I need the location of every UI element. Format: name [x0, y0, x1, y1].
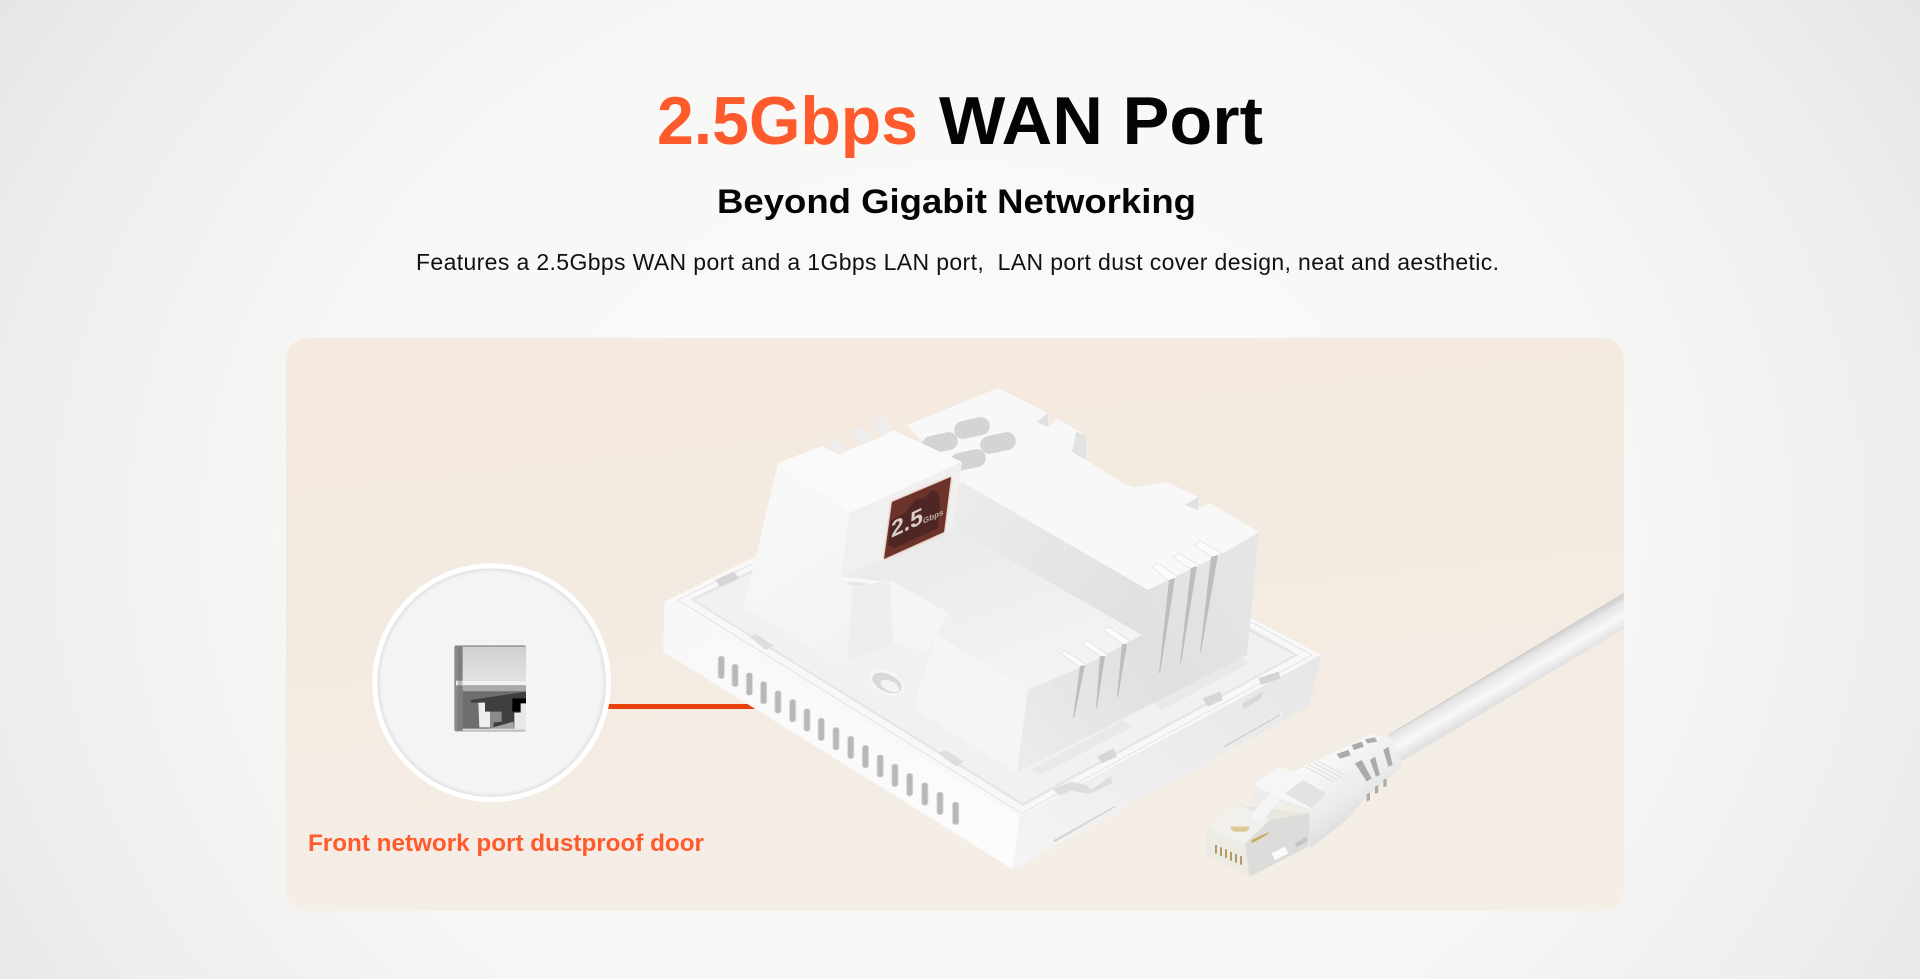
latch clip: [1250, 767, 1327, 823]
inset callout: front network port: [372, 563, 611, 802]
right side slots: [1052, 713, 1281, 843]
cable: [1388, 593, 1624, 762]
channel wall and floor: [841, 482, 1148, 690]
strain relief boot: [1290, 733, 1402, 848]
block footprints on plate: [1030, 657, 1250, 775]
groove slits: [1073, 555, 1218, 718]
WAN port with 2.5Gbps mark: 2.5: [891, 503, 923, 544]
groove ledges: [1060, 541, 1222, 668]
network cable: [1205, 593, 1624, 877]
lower block with grooves: [913, 532, 1259, 773]
rear block top with vent holes: [907, 388, 1259, 590]
WAN port with 2.5Gbps mark: Gbps: [923, 507, 944, 526]
base plate: [663, 558, 1321, 869]
title: [657, 83, 1263, 159]
title: 2.5Gbps: [657, 83, 918, 159]
RJ45 clear head: [1205, 805, 1310, 877]
leader line: [605, 704, 755, 709]
side vents: [718, 656, 959, 825]
product: wall router rear view: [663, 388, 1321, 869]
tall block with WAN port: [744, 417, 962, 665]
WAN port with 2.5Gbps mark: [884, 477, 951, 559]
plate top face: [665, 558, 1321, 817]
title: WAN Port: [939, 83, 1263, 159]
port opening: [454, 645, 526, 731]
plate sides: [663, 602, 1321, 869]
callout label: Front network port dustproof door: [308, 830, 704, 857]
description: Features a 2.5Gbps WAN port and a 1Gbps LAN port, LAN port dust cover design, neat and aesthetic.: [416, 249, 1499, 275]
subtitle: Beyond Gigabit Networking: [717, 183, 1196, 221]
panel: product stage: [286, 338, 1624, 911]
mounting hole: [867, 667, 907, 699]
